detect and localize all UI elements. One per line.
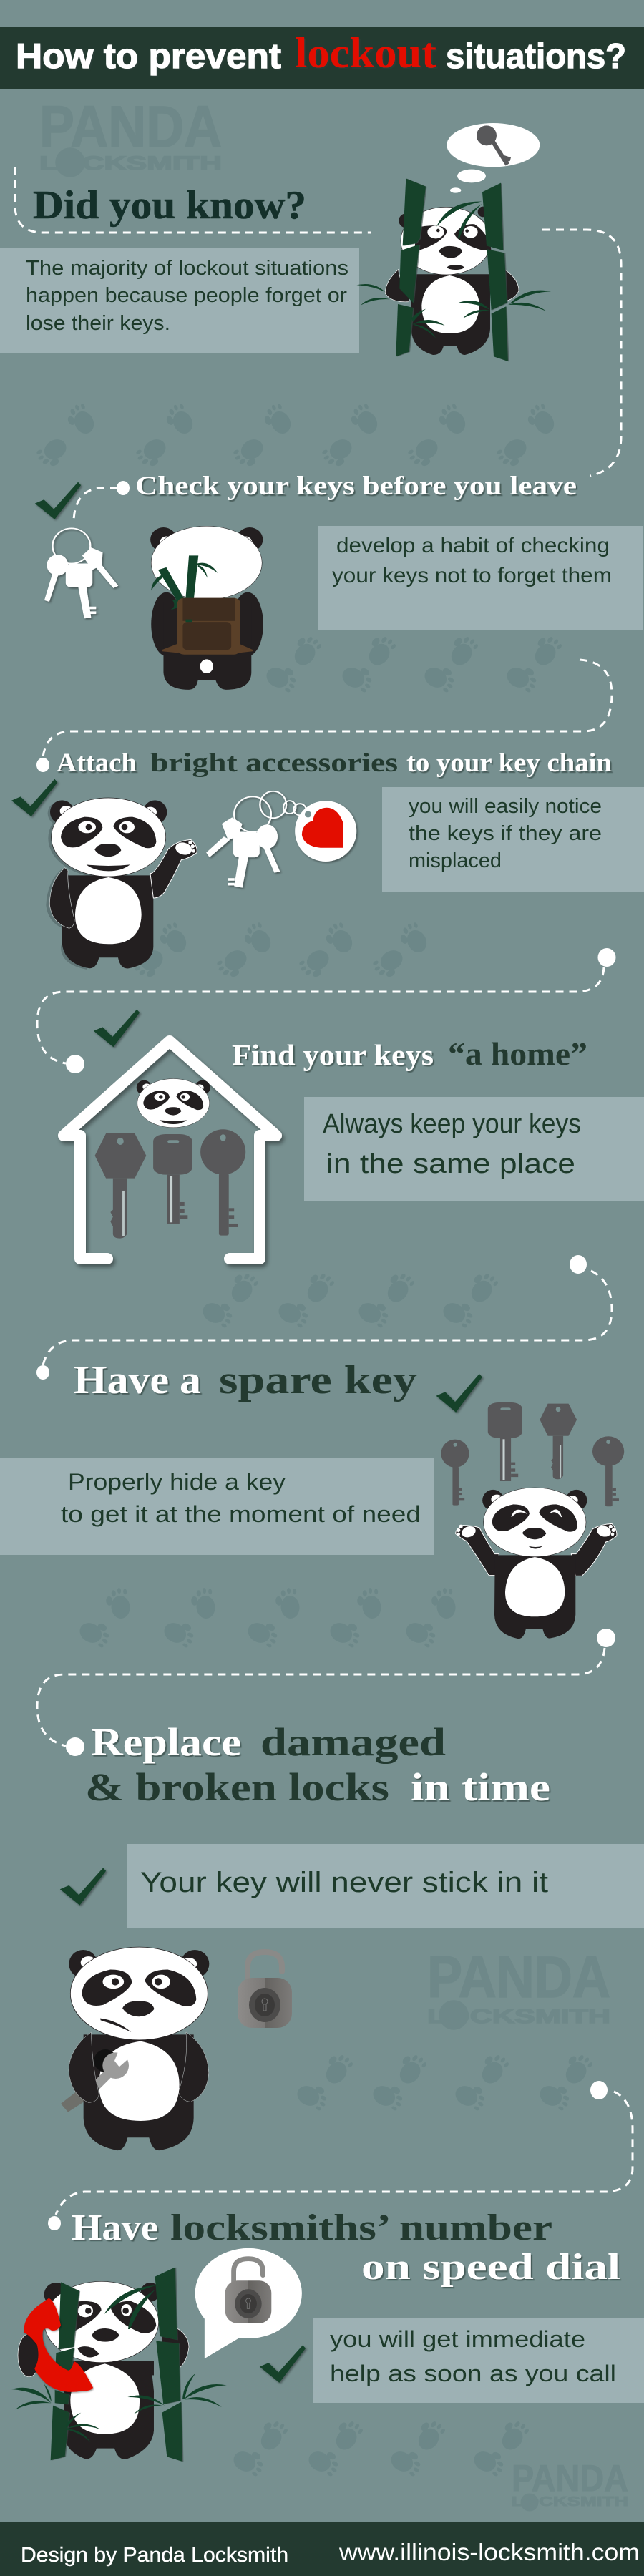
panel: bright accessories text: the keys if they are xyxy=(409,822,602,845)
heading: attach bright accessories: Attach xyxy=(57,748,137,778)
panel: check keys text: your keys not to forget them xyxy=(332,564,612,587)
heading: attach bright accessories: to your key chain xyxy=(406,748,612,778)
footer bar xyxy=(0,2522,644,2576)
panel: did you know text: happen because people forget or xyxy=(26,284,347,307)
heading: have locksmiths number: locksmiths’ number xyxy=(170,2207,552,2248)
icon: speech bubble with lock xyxy=(195,2248,302,2358)
heading: attach bright accessories xyxy=(57,748,612,778)
icon: thinking panda in bamboo xyxy=(356,123,551,361)
check mark xyxy=(60,1868,106,1906)
icon: panda from behind with backpack xyxy=(150,526,263,690)
heading: find your keys a home: “a home” xyxy=(448,1036,587,1072)
heading: replace damaged and broken locks: & broken locks xyxy=(85,1765,389,1809)
panel: did you know text: The majority of lockout situations xyxy=(26,257,348,280)
panel: bright accessories text: you will easily notice xyxy=(409,795,602,818)
panel: keys home text: in the same place xyxy=(326,1149,575,1179)
panel: bright accessories text xyxy=(382,787,644,892)
logo watermark middle: PANDA xyxy=(427,1945,610,2010)
icon: floating spare keys xyxy=(441,1402,624,1506)
panel: did you know text xyxy=(0,248,359,353)
heading: replace damaged and broken locks: in time xyxy=(411,1765,550,1809)
logo watermark bottom: LOCKSMITH xyxy=(512,2494,628,2509)
heading: have locksmiths number: on speed dial xyxy=(361,2247,620,2288)
heading: find your keys a home xyxy=(232,1036,587,1072)
panel: check keys text: develop a habit of checking xyxy=(336,534,610,557)
icon: waving panda xyxy=(46,798,197,970)
icon: white key ring xyxy=(44,528,118,618)
title bar: lockout xyxy=(295,29,436,77)
heading: have a spare key: spare key xyxy=(219,1358,417,1402)
panel: spare key text: to get it at the moment of need xyxy=(61,1501,421,1527)
panel: bright accessories text: misplaced xyxy=(409,849,502,872)
check mark xyxy=(35,482,81,519)
check mark xyxy=(260,2345,306,2383)
icon: worried panda with wrench xyxy=(61,1947,209,2150)
heading: replace damaged and broken locks: Replace xyxy=(91,1720,241,1764)
heading: have a spare key: Have a xyxy=(74,1358,201,1402)
logo watermark top: PANDA xyxy=(39,94,222,160)
panel: spare key text xyxy=(0,1458,434,1555)
footer bar: Design by Panda Locksmith xyxy=(21,2544,288,2567)
icon: panda on the phone in bamboo xyxy=(11,2267,227,2462)
heading: find your keys a home: Find your keys xyxy=(232,1038,434,1071)
heading: did you know: Did you know? xyxy=(33,183,306,228)
panel: speed dial text xyxy=(313,2318,644,2403)
heading: check your keys: Check your keys before you leave xyxy=(135,472,577,501)
icon: keys with heart tag xyxy=(206,791,356,888)
panel: spare key text: Properly hide a key xyxy=(68,1469,286,1495)
heading: have locksmiths number xyxy=(72,2207,620,2288)
footer bar: www.illinois-locksmith.com xyxy=(338,2539,640,2565)
heading: replace damaged and broken locks: damaged xyxy=(260,1720,446,1764)
panel: speed dial text: help as soon as you call xyxy=(330,2361,616,2386)
heading: have a spare key xyxy=(74,1358,417,1402)
icon: grey padlock xyxy=(238,1952,292,2028)
icon: house outline xyxy=(64,1041,276,1259)
panel: check keys text xyxy=(318,526,643,630)
icon: panda face and keys in house xyxy=(95,1079,245,1239)
logo watermark middle: LOCKSMITH xyxy=(427,2005,610,2027)
panel: speed dial text: you will get immediate xyxy=(330,2326,585,2352)
icon: happy panda arms up xyxy=(456,1488,617,1639)
panel: replace locks text: Your key will never stick in it xyxy=(140,1867,548,1898)
panel: keys home text: Always keep your keys xyxy=(323,1109,581,1139)
logo watermark top: LOCKSMITH xyxy=(39,152,222,174)
heading: replace damaged and broken locks xyxy=(85,1720,550,1809)
logo watermark bottom: PANDA xyxy=(512,2458,628,2499)
panel: did you know text: lose their keys. xyxy=(26,312,170,335)
check mark xyxy=(11,779,57,816)
dashed connector path with dots xyxy=(15,167,633,2230)
heading: have locksmiths number: Have xyxy=(72,2207,158,2248)
heading: attach bright accessories: bright accessories xyxy=(150,748,398,778)
check mark xyxy=(436,1374,482,1413)
panel: keys home text xyxy=(304,1097,644,1201)
title bar xyxy=(0,27,644,89)
check mark xyxy=(94,1010,140,1047)
title bar: situations? xyxy=(446,37,626,76)
paw print pattern xyxy=(34,401,595,2479)
title bar: How to prevent xyxy=(16,37,281,76)
panel: replace locks text xyxy=(127,1844,644,1928)
